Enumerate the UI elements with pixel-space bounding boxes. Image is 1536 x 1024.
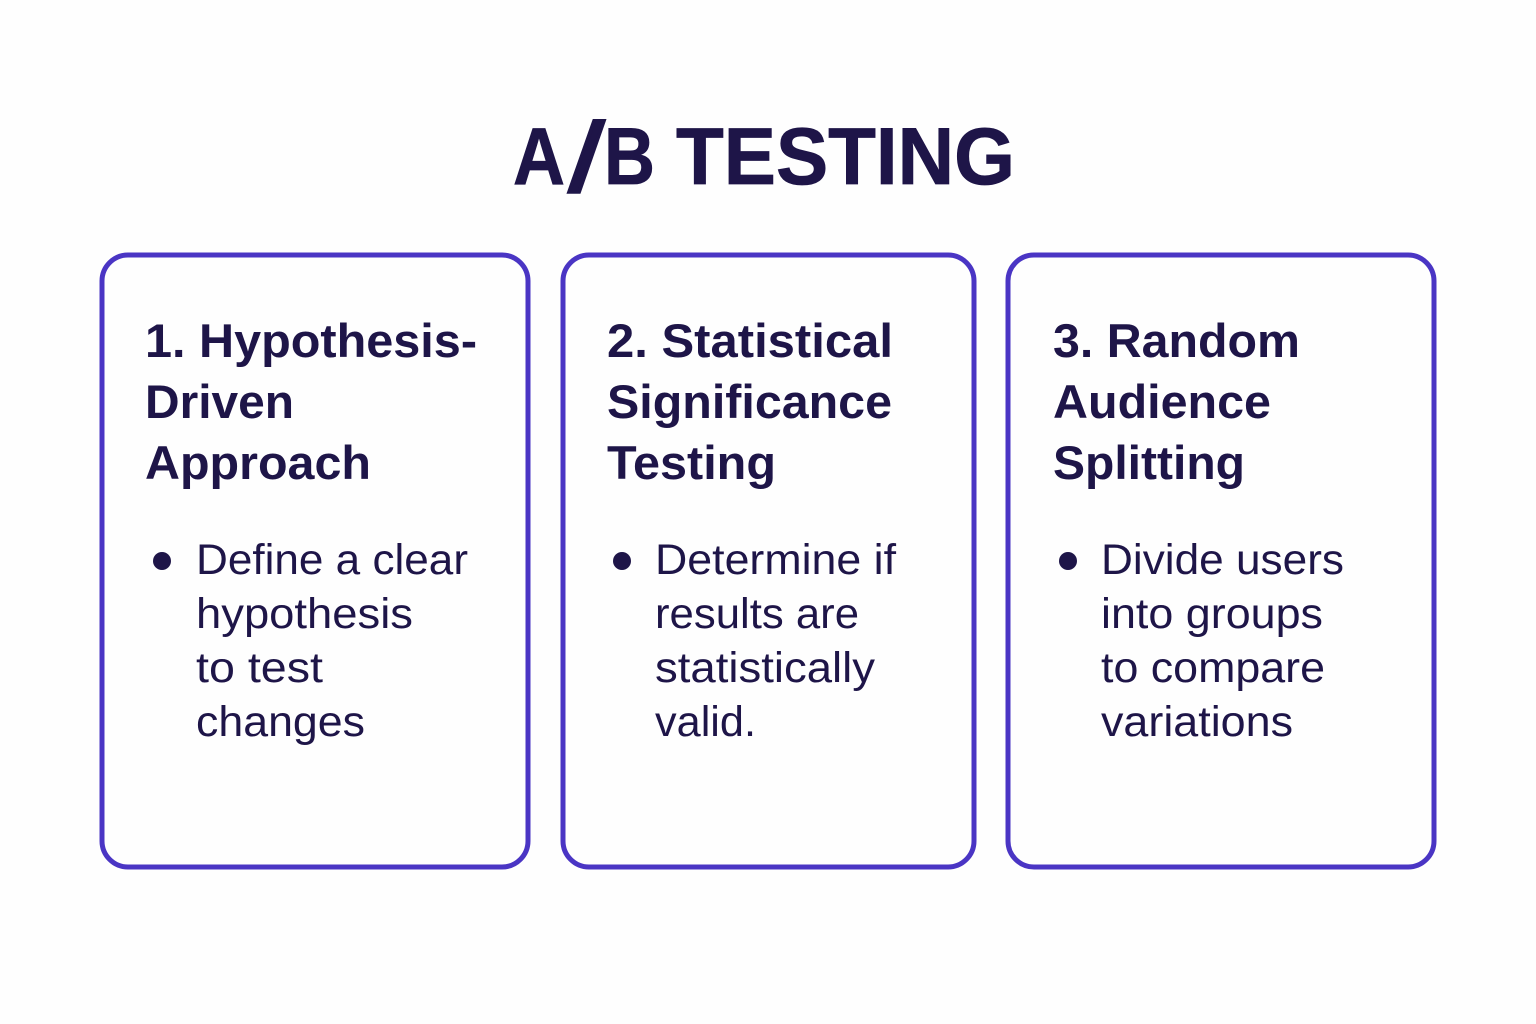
body text 3: Divide users [1101,536,1344,584]
title: B [604,112,655,202]
title: A [513,112,565,202]
body text 1: hypothesis [196,590,413,638]
panel: random audience splitting [1008,255,1434,867]
body text 2: statistically [655,644,876,692]
heading 1 [145,314,477,489]
heading 2: 2. Statistical [607,314,893,367]
body text 1: to test [196,644,323,692]
body text 2 [655,536,897,746]
panel: statistical significance testing [563,255,974,867]
bullet 3 [1059,552,1077,570]
heading 1: Driven [145,375,294,428]
body text 3 [1101,536,1344,746]
body text 1: Define a clear [196,536,468,584]
heading 3 [1053,314,1300,489]
body text 3: to compare [1101,644,1325,692]
bullet 1 [153,552,171,570]
heading 1: 1. Hypothesis- [145,314,477,367]
heading 3: Splitting [1053,436,1245,489]
heading 2: Testing [607,436,776,489]
bullet 2 [613,552,631,570]
heading 1: Approach [145,436,371,489]
heading 2 [607,314,893,489]
card outline 3 [1008,255,1434,867]
body text 3: variations [1101,698,1293,746]
card outline 1 [102,255,528,867]
title: / [569,103,604,212]
body text 1: changes [196,698,365,746]
title [513,103,1015,212]
body text 2: valid. [655,698,756,746]
card outline 2 [563,255,974,867]
body text 2: Determine if [655,536,897,584]
heading 3: Audience [1053,375,1271,428]
body text 1 [196,536,468,746]
body text 2: results are [655,590,859,638]
heading 3: 3. Random [1053,314,1300,367]
heading 2: Significance [607,375,892,428]
panel: hypothesis-driven approach [102,255,528,867]
title: TESTING [676,112,1015,202]
body text 3: into groups [1101,590,1323,638]
